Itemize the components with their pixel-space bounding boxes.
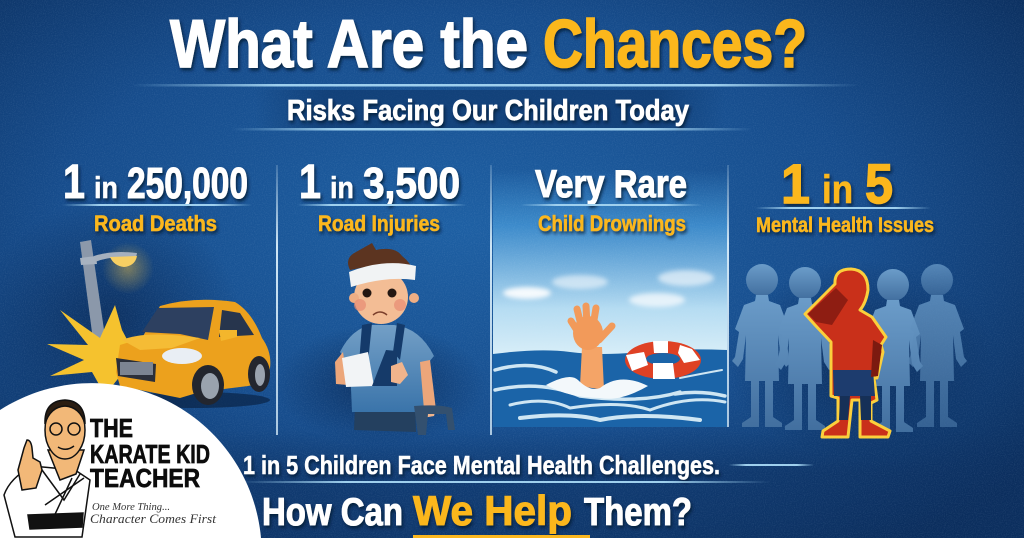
icon: highlighted distressed child xyxy=(805,269,890,437)
icon: sea with drowning hand and life ring xyxy=(493,349,727,427)
stat: 1 in 3,500 road injuries: 3,500 xyxy=(363,159,460,208)
stat: very rare child drownings xyxy=(520,163,702,236)
title: What Are the xyxy=(170,6,528,82)
stat: 1 in 3,500 road injuries: 1 xyxy=(299,156,321,209)
logo tagline xyxy=(90,501,216,526)
icon: life ring xyxy=(625,341,701,379)
subtitle rule xyxy=(232,128,752,130)
strap line: 1 in 5 children: 1 in 5 Children Face Mental Health Challenges. xyxy=(243,450,720,480)
logo character xyxy=(4,400,90,537)
logo name: TEACHER xyxy=(90,463,200,493)
closing question: How Can xyxy=(262,491,403,534)
stat: 1 in 3,500 road injuries: Road Injuries xyxy=(318,211,440,236)
stat: 1 in 250,000 road deaths: 1 xyxy=(63,156,85,209)
dark shading behind crash xyxy=(0,200,240,440)
subtitle band xyxy=(255,90,725,128)
stat: 1 in 3,500 road injuries xyxy=(297,156,467,236)
dark shading behind kids xyxy=(725,260,995,460)
icon: injured boy xyxy=(335,243,455,435)
logo badge xyxy=(0,383,261,538)
title: Chances? xyxy=(543,6,807,82)
logo tagline: One More Thing... xyxy=(92,501,170,513)
title rule xyxy=(132,84,858,86)
stat: 1 in 3,500 road injuries: in xyxy=(330,170,354,205)
closing question: Them? xyxy=(584,491,692,534)
stat: 1 in 250,000 road deaths xyxy=(62,156,252,236)
stat: 1 in 5 mental health issues: 5 xyxy=(865,152,893,215)
icon: crash starburst xyxy=(47,305,130,395)
title xyxy=(170,6,807,82)
icon: street lamp xyxy=(80,240,154,385)
icon: raised hand xyxy=(571,306,612,390)
stat: very rare child drownings: Child Drownings xyxy=(538,211,686,236)
strap rule below xyxy=(240,481,770,483)
icon: yellow car xyxy=(116,300,270,408)
closing question xyxy=(262,487,692,534)
dark bottom band xyxy=(0,430,1024,538)
stat: 1 in 250,000 road deaths: 250,000 xyxy=(127,159,248,208)
column dividers xyxy=(276,165,729,435)
stat: 1 in 5 mental health issues xyxy=(755,152,934,237)
stat: 1 in 250,000 road deaths: Road Deaths xyxy=(94,211,217,236)
stat: 1 in 250,000 road deaths: in xyxy=(94,170,118,205)
logo name: THE xyxy=(90,413,133,443)
stat: very rare child drownings: Very Rare xyxy=(535,163,687,206)
stat: 1 in 5 mental health issues: in xyxy=(822,168,853,212)
icon: group of silhouette children xyxy=(732,264,967,432)
logo name: KARATE KID xyxy=(90,439,210,469)
logo tagline: Character Comes First xyxy=(90,511,216,526)
yellow underline xyxy=(413,535,590,538)
stat: 1 in 5 mental health issues: 1 xyxy=(781,152,810,215)
strap rule right xyxy=(729,464,814,466)
dark shading behind road injuries boy xyxy=(275,325,485,445)
closing question: We Help xyxy=(413,487,572,534)
icon: water splash xyxy=(546,377,648,399)
subtitle: Risks Facing Our Children Today xyxy=(287,95,689,127)
logo name xyxy=(90,413,210,493)
stat: 1 in 5 mental health issues: Mental Health Issues xyxy=(756,214,934,237)
panel: sky and sea backdrop for drownings xyxy=(493,170,727,355)
